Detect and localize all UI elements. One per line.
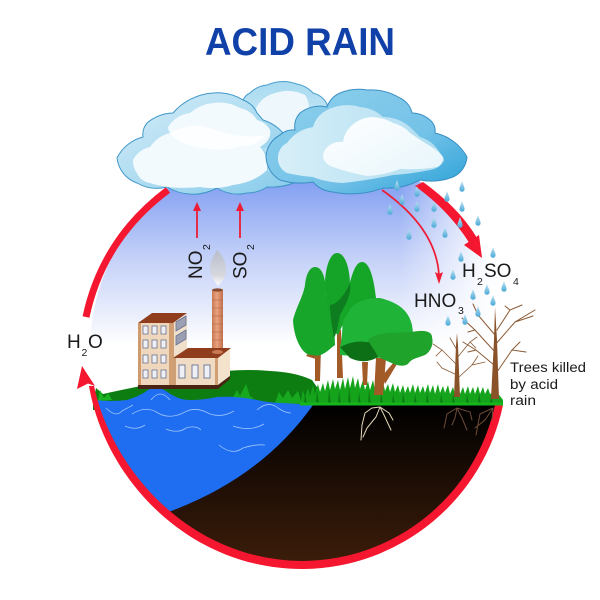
arrow: NO2 up xyxy=(193,202,201,238)
label: H2O: H xyxy=(67,332,81,353)
rain drops xyxy=(387,180,507,326)
cloud: right xyxy=(266,89,467,194)
label: H2SO4 xyxy=(462,261,519,288)
label: H2O xyxy=(67,332,103,359)
label: trees killed by acid rain: by acid xyxy=(510,377,558,392)
label: NO2: NO xyxy=(186,250,207,279)
factory: tall building xyxy=(138,313,187,386)
roots: healthy tree xyxy=(361,407,393,440)
water body xyxy=(95,388,313,514)
label: H2SO4: 4 xyxy=(513,276,519,288)
roots xyxy=(361,407,493,440)
label: SO2: SO xyxy=(230,252,252,279)
label: SO2 xyxy=(230,244,257,279)
label: HNO3 xyxy=(414,291,464,317)
water ripples xyxy=(106,394,291,451)
tree canopy: tall trees xyxy=(293,267,335,356)
tree canopy: big tree xyxy=(340,298,414,358)
ring arc lower-left with arrow to H2O xyxy=(77,366,503,569)
dead tree: large xyxy=(462,304,535,399)
factory xyxy=(138,250,231,389)
dead tree: small xyxy=(433,333,485,397)
label: trees killed by acid rain xyxy=(510,360,586,408)
factory: base xyxy=(138,376,230,389)
label: HNO3: 3 xyxy=(458,305,464,317)
hill and grass xyxy=(93,370,330,410)
label: SO2: 2 xyxy=(245,244,257,250)
arrow: SO2 up xyxy=(236,202,244,238)
soil xyxy=(155,405,498,564)
label: H2SO4: 2 xyxy=(477,276,483,288)
factory: chimney xyxy=(212,288,223,353)
label: H2O: O xyxy=(88,332,103,353)
label: H2O: 2 xyxy=(82,347,88,359)
label: H2SO4: H xyxy=(462,261,476,282)
factory: low building xyxy=(173,348,231,386)
label: trees killed by acid rain: Trees killed xyxy=(510,360,586,375)
label: trees killed by acid rain: rain xyxy=(510,393,536,408)
ring arc upper-left xyxy=(86,190,168,317)
sky background xyxy=(91,181,499,333)
ring arrow to H2SO4 xyxy=(415,182,482,258)
cloud: back xyxy=(243,82,330,170)
curved arrow to HNO3 xyxy=(382,190,443,284)
trees xyxy=(293,253,433,395)
label: H2SO4: SO xyxy=(484,261,511,282)
label: HNO3: HNO xyxy=(414,291,456,312)
roots: dead trees xyxy=(444,408,493,435)
dead trees xyxy=(433,304,535,399)
factory: smoke xyxy=(210,250,226,286)
label: NO2 xyxy=(186,244,213,279)
label: NO2: 2 xyxy=(201,244,213,250)
clouds xyxy=(117,82,467,194)
tree trunks xyxy=(306,330,397,395)
infographic: acid rain cycle xyxy=(68,28,585,569)
cloud: left xyxy=(117,93,300,194)
grass blades xyxy=(300,376,503,405)
title: ACID RAIN xyxy=(205,21,395,64)
